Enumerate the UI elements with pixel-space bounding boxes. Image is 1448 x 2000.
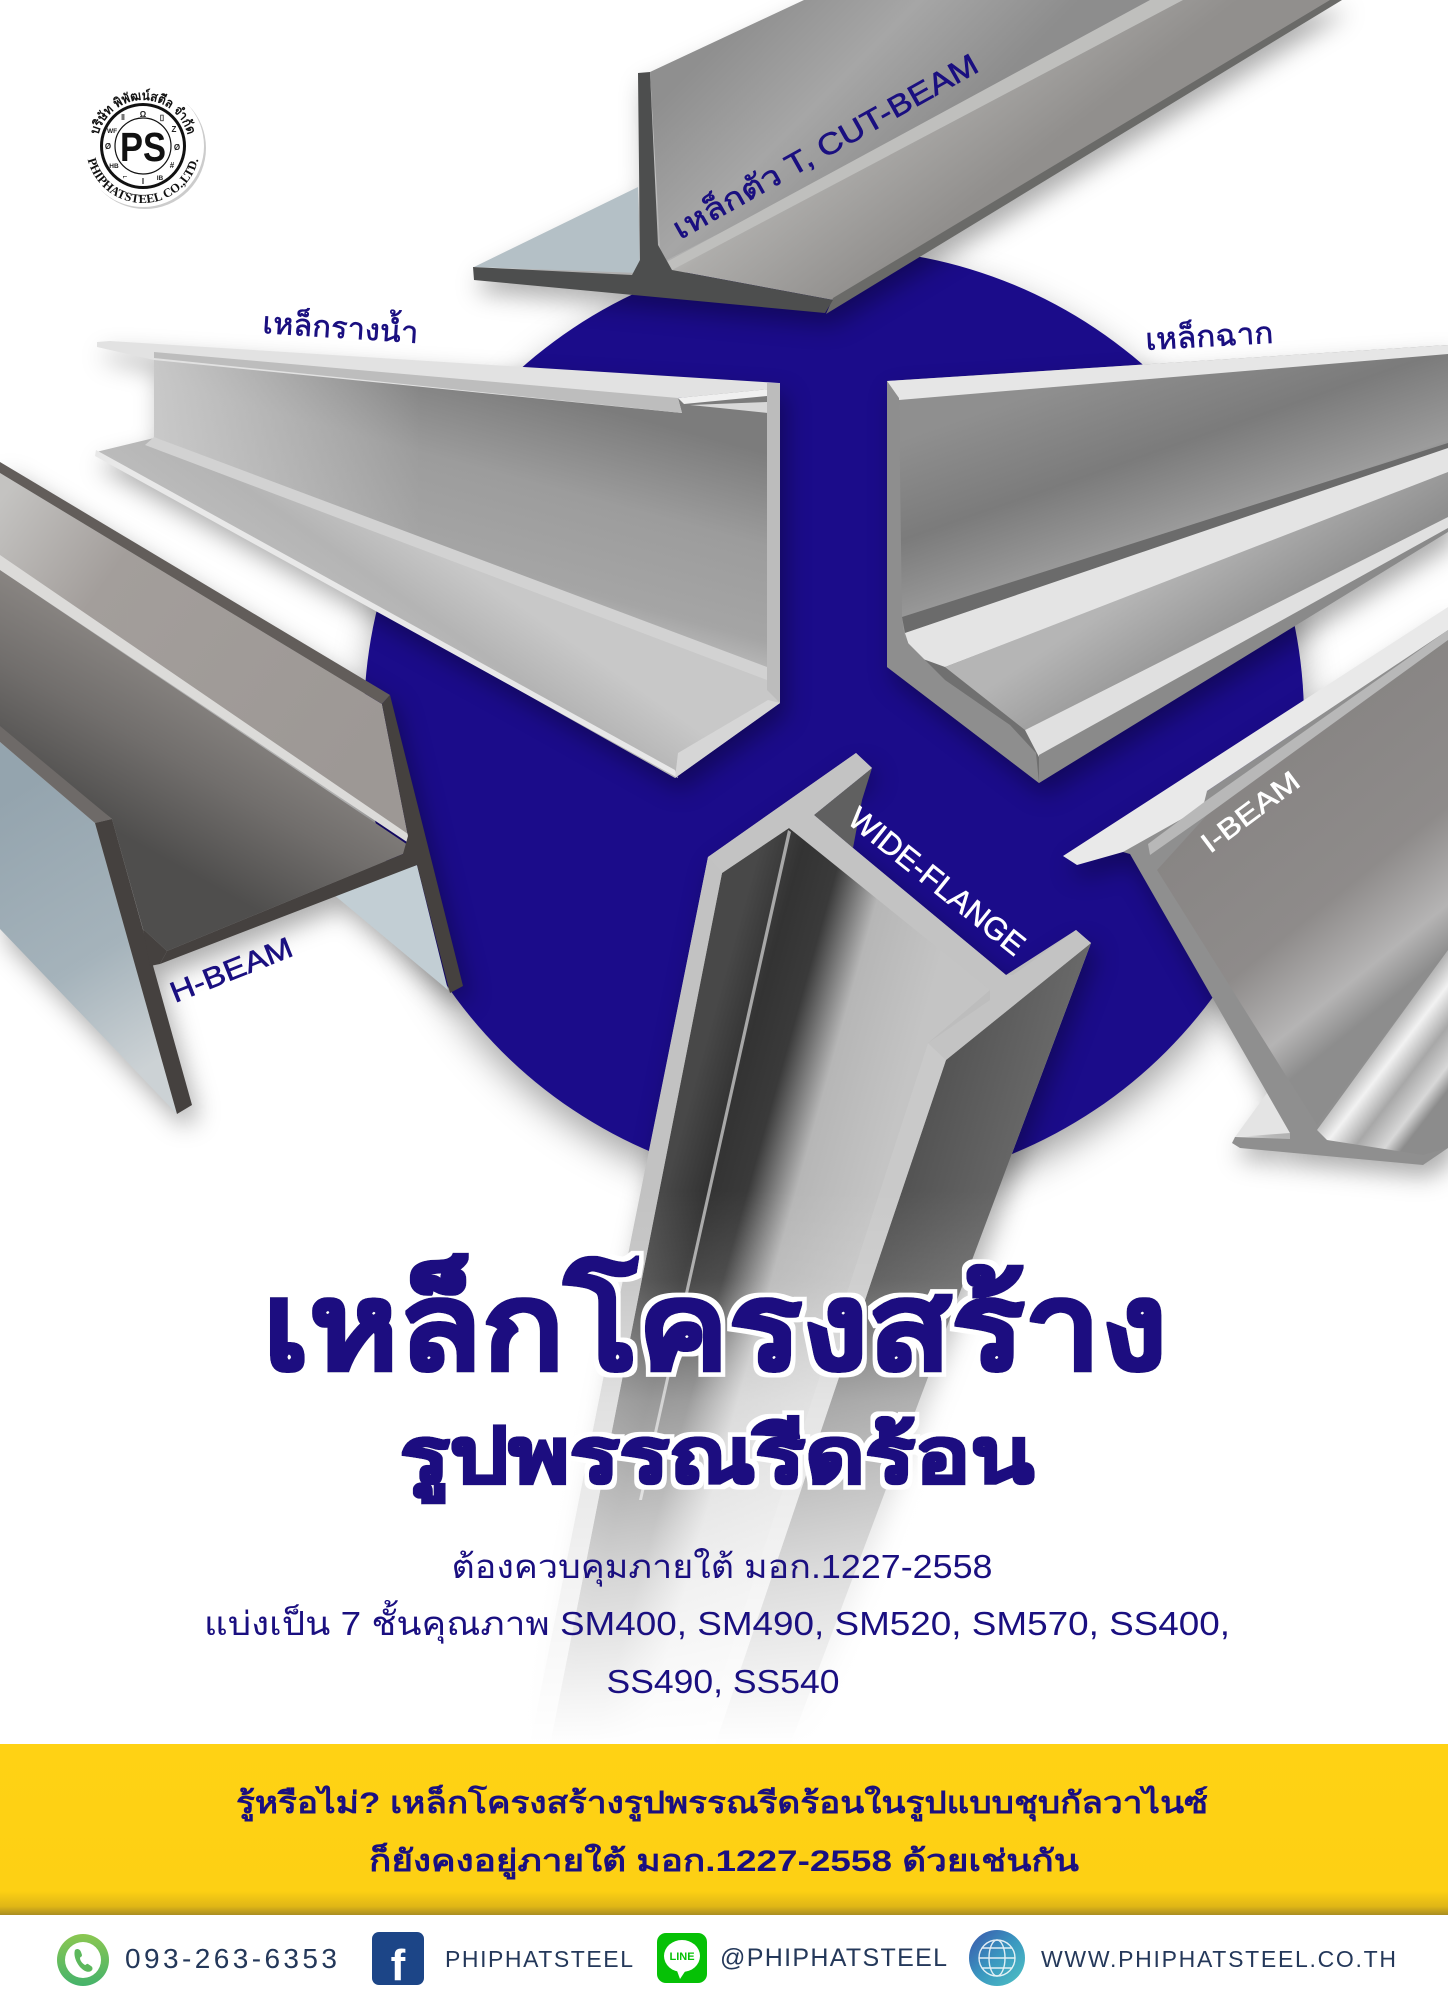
label: angle: เหล็กฉาก xyxy=(1144,314,1274,357)
icon: globe xyxy=(969,1930,1025,1986)
label: I-beam: I-BEAM xyxy=(1195,765,1306,859)
label: channel: เหล็กรางน้ำ xyxy=(262,301,420,350)
body text: ต้องควบคุมภายใต้ มอก.1227-2558 xyxy=(452,1548,992,1587)
company logo: Z xyxy=(172,125,177,134)
company logo: WF xyxy=(107,128,117,135)
company logo: PHIPHATSTEEL CO.,LTD. xyxy=(88,157,198,203)
main title: เหล็กโครงสร้าง xyxy=(262,1254,1168,1395)
icon: facebook: f xyxy=(391,1941,406,1990)
beam: H-beam xyxy=(0,462,463,1114)
company logo: PS xyxy=(120,124,166,170)
company logo: I xyxy=(142,177,144,186)
company logo: IB xyxy=(157,175,164,182)
company logo: ‖ xyxy=(121,113,125,122)
contact: line: @PHIPHATSTEEL xyxy=(720,1944,947,1972)
beam: T cut-beam xyxy=(473,0,1342,314)
company logo: บริษัท พิพัฒน์สตีล จำกัด xyxy=(91,88,195,134)
subtitle: รูปพรรณรีดร้อน xyxy=(400,1414,1034,1503)
beam: wide-flange xyxy=(530,753,1091,1745)
body text: SS490, SS540 xyxy=(606,1663,840,1700)
label: T cut-beam: เหล็กตัว T, CUT-BEAM xyxy=(666,45,984,246)
label: wide-flange: WIDE-FLANGE xyxy=(842,800,1032,963)
company logo xyxy=(88,88,206,209)
icon: line xyxy=(657,1933,707,1983)
icon: facebook xyxy=(372,1932,424,1990)
company logo: Ø xyxy=(105,142,111,151)
company logo: # xyxy=(170,161,175,170)
icon: line: LINE xyxy=(669,1951,695,1963)
company logo: Ω xyxy=(140,110,147,119)
label: H-beam: H-BEAM xyxy=(166,932,297,1009)
icon: phone xyxy=(57,1934,109,1986)
company logo: HB xyxy=(109,163,119,170)
contact: facebook: PHIPHATSTEEL xyxy=(445,1946,633,1972)
body text: แบ่งเป็น 7 ชั้นคุณภาพ SM400, SM490, SM520, SM570, SS400, xyxy=(204,1600,1230,1644)
blue background circle xyxy=(364,249,1304,1189)
beam: I-beam xyxy=(1063,607,1448,1165)
beam fade-out to white xyxy=(480,1190,1120,1746)
contact: phone number: 093-263-6353 xyxy=(125,1943,337,1974)
yellow callout band: รู้หรือไม่? เหล็กโครงสร้างรูปพรรณรีดร้อนในรูปแบบชุบกัลวาไนซ์ xyxy=(236,1784,1208,1822)
beam: channel xyxy=(95,341,780,778)
body text xyxy=(204,1548,1230,1700)
contact: website: WWW.PHIPHATSTEEL.CO.TH xyxy=(1041,1946,1396,1972)
yellow callout band: ก็ยังคงอยู่ภายใต้ มอก.1227-2558 ด้วยเช่นกัน xyxy=(369,1842,1080,1880)
company logo: ⌐ xyxy=(123,172,128,181)
company logo: Ø xyxy=(174,143,180,152)
company logo: ▯ xyxy=(160,113,164,122)
yellow callout band xyxy=(0,1744,1448,1915)
beam: angle xyxy=(887,345,1448,783)
